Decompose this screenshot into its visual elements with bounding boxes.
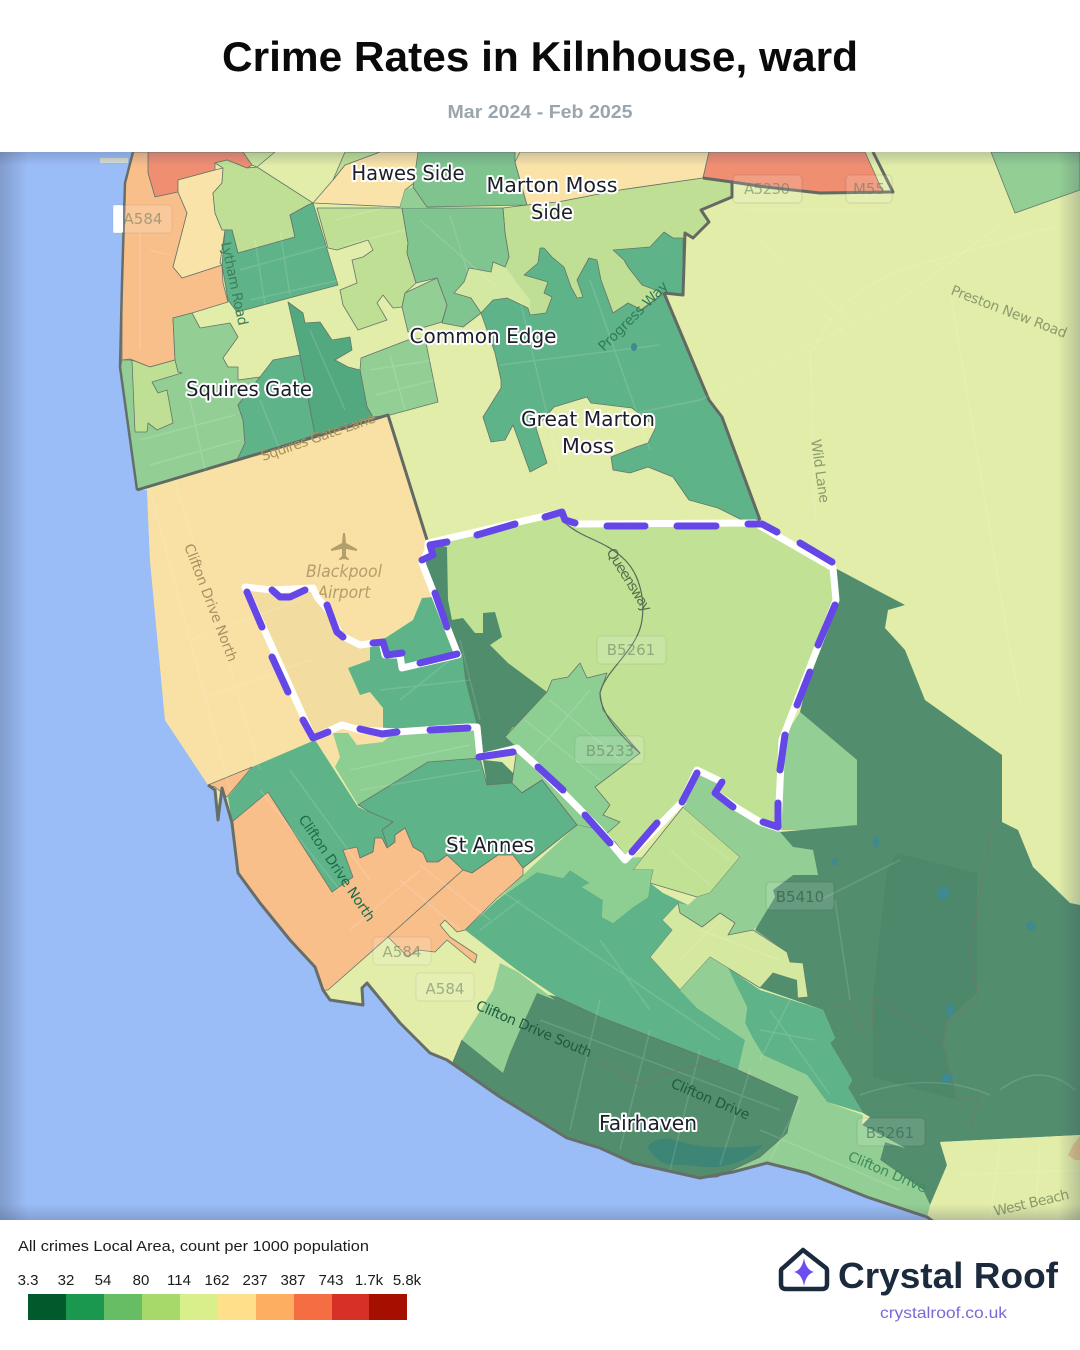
area: small green south of Hawes Side bbox=[400, 187, 427, 207]
legend values: 80 bbox=[133, 1272, 149, 1289]
road shield: B5410: B5410 bbox=[776, 888, 824, 906]
legend values: 3.3 bbox=[18, 1272, 38, 1289]
area: West Beach pale bbox=[930, 1135, 1080, 1220]
area: small mid green block bbox=[402, 278, 447, 332]
place label: St Annes: St Annes bbox=[446, 833, 534, 857]
road shield: A584 north: A584 bbox=[124, 210, 162, 228]
road shield: A584 lower two: A584 bbox=[426, 980, 464, 998]
legend values: 54 bbox=[95, 1272, 111, 1289]
area: Squires Gate green bbox=[237, 355, 315, 460]
crime rate areas bbox=[120, 152, 1080, 1220]
area: mid green wedge bbox=[680, 957, 752, 1040]
road shield: B5261 south: B5261 bbox=[866, 1124, 914, 1142]
area: ward west green bbox=[348, 597, 477, 730]
area: coastal orange west bbox=[232, 792, 463, 990]
area: west coast orange bbox=[122, 152, 228, 367]
area: Hawes Side green bbox=[413, 152, 527, 207]
legend values: 5.8k bbox=[393, 1272, 422, 1289]
legend title: All crimes Local Area, count per 1000 population bbox=[18, 1238, 369, 1255]
road shield: M55 bbox=[846, 175, 892, 203]
airport label and plane icon: Airport bbox=[317, 583, 372, 603]
area: ward beige section bbox=[245, 587, 383, 738]
legend values: 743 bbox=[318, 1272, 344, 1289]
area: St Annes mid green bbox=[497, 825, 653, 923]
area: Kilgrimol mid green bbox=[678, 770, 818, 935]
road shield: A584 lower two bbox=[416, 973, 474, 1001]
place label: Marton Moss Side: Side bbox=[531, 200, 573, 224]
sea bbox=[0, 152, 928, 1220]
pier bbox=[100, 158, 128, 163]
area: Fairhaven dark green bbox=[453, 993, 798, 1178]
area: Squires Gate darker green bbox=[288, 302, 373, 435]
area: Squires Gate mid green bbox=[120, 313, 260, 490]
ward boundary: Kilnhouse bbox=[245, 512, 836, 860]
road label: Lytham Road: Lytham Road bbox=[217, 241, 250, 327]
road label: Clifton Drive South: Clifton Drive South bbox=[473, 998, 594, 1061]
area: St Annes west green bbox=[228, 740, 393, 892]
area: east of ward mid green bbox=[778, 712, 857, 830]
area: M55 red bbox=[703, 152, 883, 193]
area: south of ward light green bbox=[633, 807, 740, 897]
road shield: A584 north bbox=[113, 205, 172, 233]
road shield: B5261 north bbox=[597, 636, 666, 664]
place label: Great Marton Moss: Great Marton bbox=[521, 407, 655, 431]
area: Great Marton green bbox=[481, 248, 760, 520]
footpath lines bbox=[600, 820, 993, 1127]
legend bbox=[18, 1238, 422, 1320]
place label: Great Marton Moss: Moss bbox=[562, 434, 614, 458]
area: St Annes south green bbox=[465, 870, 745, 1070]
legend colour scale bbox=[28, 1294, 407, 1320]
road label: Wild Lane: Wild Lane bbox=[807, 438, 832, 504]
area: central mid green bbox=[402, 208, 509, 327]
area: pale blob at Common Edge bbox=[454, 262, 530, 313]
area: top right green bbox=[991, 152, 1080, 213]
road label: Clifton Drive east: Clifton Drive bbox=[845, 1149, 929, 1197]
Queensway road line bbox=[565, 523, 643, 753]
area: Ansdell green bbox=[728, 968, 863, 1113]
legend values: 32 bbox=[58, 1272, 74, 1289]
road shield: M55: M55 bbox=[853, 180, 885, 198]
road shield: B5233: B5233 bbox=[586, 742, 634, 760]
area: Marton yellow bbox=[515, 152, 709, 205]
area: small orange coast bbox=[208, 767, 252, 797]
road label: Squires Gate Lane: Squires Gate Lane bbox=[259, 411, 378, 465]
road shield: A5230: A5230 bbox=[744, 180, 790, 198]
area: St Annes central mid green bbox=[333, 727, 480, 805]
area: central pale strip bbox=[650, 903, 808, 998]
area: ward main light green bbox=[428, 512, 836, 858]
airport label and plane icon bbox=[306, 533, 382, 603]
street network bbox=[140, 205, 1080, 1220]
area: St Annes central green bbox=[358, 758, 577, 873]
choropleth map bbox=[0, 150, 1080, 1222]
area: Clifton South mid green bbox=[462, 963, 555, 1073]
area: wedge north of Hawes Side bbox=[333, 152, 380, 180]
place label: Great Marton Moss bbox=[521, 407, 655, 458]
land base bbox=[120, 150, 1080, 1222]
road shield: B5410 bbox=[766, 882, 834, 910]
place label: Common Edge: Common Edge bbox=[410, 324, 556, 348]
area: small tan patch bbox=[1068, 1136, 1080, 1160]
subtitle: date range: Mar 2024 - Feb 2025 bbox=[448, 101, 632, 122]
road shield: A584 lower one bbox=[373, 937, 431, 965]
road shield: B5233 bbox=[575, 736, 644, 764]
road shield: A5230 bbox=[733, 175, 802, 203]
area: darker sub-block bbox=[873, 853, 977, 1100]
area: dark green spur bbox=[483, 760, 513, 785]
icon: house with star bbox=[781, 1250, 827, 1289]
road label: Queensway: Queensway bbox=[603, 546, 654, 615]
road label: West Beach: West Beach bbox=[992, 1187, 1071, 1220]
area: Clifton Drive mid green bbox=[717, 1037, 930, 1217]
road shield: B5261 north: B5261 bbox=[607, 641, 655, 659]
area: green Lytham bbox=[222, 203, 338, 312]
area: Marton light green bbox=[502, 178, 730, 314]
coastline bbox=[120, 152, 137, 490]
place label: Squires Gate: Squires Gate bbox=[186, 377, 312, 401]
website: crystalroof.co.uk bbox=[880, 1305, 1008, 1322]
place label: Fairhaven: Fairhaven bbox=[599, 1111, 697, 1135]
road label: Preston New Road: Preston New Road bbox=[949, 283, 1069, 342]
wordmark: Crystal Roof bbox=[838, 1255, 1059, 1296]
area: north-west red bbox=[148, 152, 252, 197]
area: north wedge near arc bbox=[243, 152, 275, 167]
strong boundary lines bbox=[137, 152, 893, 543]
road shield: A584 lower one: A584 bbox=[383, 943, 421, 961]
legend values: 237 bbox=[242, 1272, 268, 1289]
area: pale yellow strip bbox=[173, 168, 225, 278]
area: ward dark green bbox=[420, 543, 548, 758]
area: coastal orange east bbox=[388, 855, 523, 963]
area: B5233 mid green bbox=[505, 663, 640, 858]
area: north central light green bbox=[317, 208, 416, 330]
ponds bbox=[631, 343, 1036, 1083]
area: airport yellow bbox=[147, 415, 433, 785]
legend values: 114 bbox=[167, 1272, 191, 1289]
logo: Crystal Roof bbox=[781, 1250, 1059, 1322]
map edge shading bbox=[0, 152, 1080, 1220]
area: Squires Gate light green bbox=[132, 360, 182, 432]
place label: Marton Moss Side bbox=[486, 173, 618, 224]
area: light green north bbox=[213, 160, 313, 253]
area: small green near Progress Way bbox=[613, 232, 683, 295]
area: south central mid green block bbox=[360, 338, 438, 417]
place label: Hawes Side: Hawes Side bbox=[352, 161, 464, 185]
airport label and plane icon: Blackpool bbox=[306, 562, 382, 582]
road label: Clifton Drive North west: Clifton Drive North bbox=[180, 542, 240, 664]
road shield: B5261 south bbox=[857, 1118, 925, 1146]
road label: Clifton Drive Fairhaven: Clifton Drive bbox=[668, 1076, 752, 1124]
legend values: 1.7k bbox=[355, 1272, 384, 1289]
southern coastline bbox=[208, 785, 934, 1222]
area: Hawes Side yellow bbox=[313, 152, 418, 207]
area: fairhaven lake bbox=[647, 1138, 763, 1167]
road label: Progress Way: Progress Way bbox=[596, 278, 672, 355]
place label: Marton Moss Side: Marton Moss bbox=[486, 173, 618, 197]
road label: Clifton Drive North east: Clifton Drive North bbox=[295, 812, 378, 925]
legend values bbox=[18, 1272, 422, 1289]
title: Crime Rates in Kilnhouse, ward bbox=[222, 33, 858, 80]
legend values: 162 bbox=[204, 1272, 230, 1289]
area: eastern dark green bbox=[755, 568, 1080, 1205]
legend values: 387 bbox=[280, 1272, 306, 1289]
